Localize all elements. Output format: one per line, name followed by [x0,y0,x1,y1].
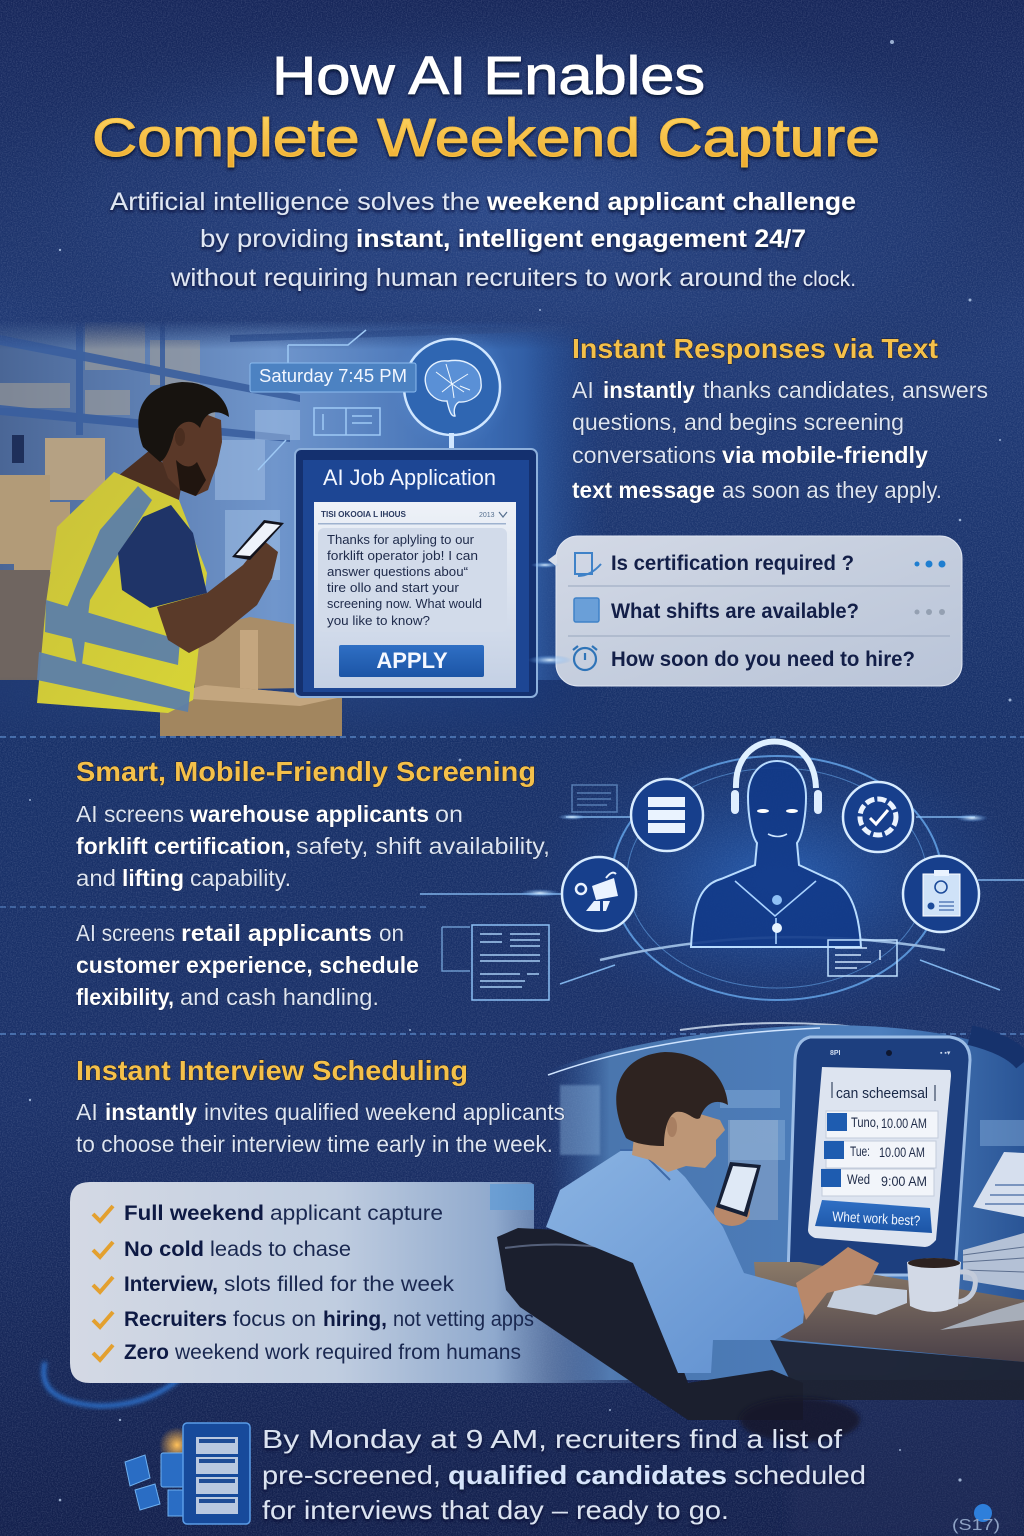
recruiter [546,1052,879,1373]
body: interview scheduling [76,1099,565,1157]
closing statement: pre-screened, [262,1460,441,1490]
benefits checklist card: Full weekend [124,1202,264,1225]
benefits checklist card: Recruiters [124,1308,227,1331]
body: warehouse screening: lifting [122,865,184,891]
body: retail screening: customer experience, schedule [76,952,419,978]
body: warehouse screening: on [435,801,463,827]
tablet: AI job application: forklift operator job! I can [327,549,478,563]
timestamp badge: Saturday 7:45 PM [259,366,407,386]
benefits checklist card: leads to chase [210,1238,351,1261]
benefits checklist card: focus on [233,1308,316,1331]
closing statement [262,1424,866,1525]
tablet: AI job application: answer questions abou“ [327,565,468,579]
tablet: scheduling: 8PI [830,1050,841,1057]
icon: alarm clock [573,646,597,670]
icon: brain hologram [390,325,514,449]
body: instant responses [572,377,988,503]
desk [754,1262,1024,1362]
figure: AI agent [691,742,861,947]
icon circle: check badge [843,782,913,852]
hair [616,1052,728,1146]
tablet: scheduling: 9:00 AM [881,1174,927,1189]
body: retail screening: retail applicants [181,920,372,946]
tablet: scheduling: 10.00 AM [879,1145,925,1160]
tablet: AI job application: screening now. What would [327,597,482,611]
icon circle: clipboard [903,856,979,932]
intro text: without requiring human recruiters to work around [170,264,763,292]
neck and face [632,1108,725,1172]
closing statement: By Monday at 9 AM, [262,1424,547,1454]
scene: warehouse worker and AI job application [0,320,610,740]
chat question card: What shifts are available? [611,600,859,623]
scene: recruiter at desk [497,1037,1024,1442]
benefits checklist card: weekend work required from humans [174,1341,521,1364]
body: instant responses: questions, and begins screening [572,409,904,435]
face [160,412,222,496]
chat question card [556,536,962,686]
page code badge [952,1504,1000,1534]
tablet: AI job application: APPLY [376,648,448,673]
tablet: scheduling: Tue: [850,1144,870,1159]
closing statement: qualified candidates [448,1460,727,1490]
body: warehouse screening: warehouse applicants [189,801,429,827]
heading: smart screening: Smart, Mobile-Friendly Screening [76,756,536,787]
title: How AI Enables [272,46,705,106]
body: retail screening: flexibility, [76,984,174,1010]
laptop [827,1283,907,1315]
icon circle: lifting safety [562,857,636,931]
closing statement: recruiters find a list of [555,1424,843,1454]
tablet: scheduling: 10.00 AM [881,1116,927,1131]
phone [232,520,284,560]
benefits checklist card: hiring, [323,1308,387,1331]
title [92,46,880,168]
body: instant responses: conversations [572,442,716,468]
tablet: AI job application [295,449,537,697]
benefits checklist card: Zero [124,1341,169,1364]
body: warehouse screening: and [76,865,116,891]
office backdrop [548,1025,1024,1536]
body: warehouse screening: AI screens [76,801,184,827]
body: instant responses: text message [572,477,715,503]
closing statement: scheduled [734,1460,866,1490]
body: retail screening: and cash handling. [180,984,379,1010]
tablet: AI job application: you like to know? [327,614,430,628]
tablet: scheduling: can scheemsal [836,1085,928,1102]
body: warehouse screening [76,801,550,891]
chat question card: Is certification required ? [611,552,854,575]
status dots [914,560,946,568]
benefits checklist card: No cold [124,1238,204,1261]
timestamp badge [250,363,416,392]
body: instant responses: AI [572,377,594,403]
data lines [420,817,1024,990]
neck [118,450,182,505]
packing boxes [160,617,342,736]
benefits checklist card: slots filled for the week [224,1273,455,1296]
benefits checklist card: not vetting apps [393,1308,534,1331]
tablet: scheduling [788,1037,970,1275]
icon: certification [575,553,601,576]
stack of papers [963,1152,1024,1290]
benefits checklist card: applicant capture [270,1202,443,1225]
tablet: AI job application: Thanks for aplyling to our [327,533,474,547]
desk chair [497,1228,860,1442]
tablet: scheduling: Whet work best? [832,1208,921,1229]
intro text: instant, intelligent engagement 24/7 [356,225,806,253]
coffee mug [907,1258,975,1312]
body: instant responses: instantly [603,377,695,403]
AI hologram network [420,735,1024,1030]
body: interview scheduling: AI [76,1099,98,1125]
body: retail screening [76,920,419,1010]
icon: shifts [574,598,599,622]
tablet: AI job application: tire ollo and start your [327,581,459,595]
icon: server phone with documents [125,1423,250,1524]
document panels [442,785,897,1000]
intro text: Artificial intelligence solves the [110,188,480,216]
benefits checklist card [70,1182,660,1383]
body: warehouse screening: safety, shift availability, [296,833,550,859]
arm [157,540,278,653]
benefits checklist card: Interview, [124,1273,218,1296]
glow connector [528,554,572,665]
sleeve [118,505,207,608]
closing statement: for interviews that day – ready to go. [262,1495,729,1525]
hair [138,382,229,462]
title: Complete Weekend Capture [92,108,880,168]
tablet: AI job application: 2013 [479,512,495,519]
vest [37,472,207,713]
orbit rings [600,756,945,1030]
tablet: AI job application: TISI OKOOIA L IHOUS [321,509,406,519]
body: interview scheduling: invites qualified weekend applicants [204,1099,565,1125]
tablet: AI job application: AI Job Application [323,465,496,490]
heading: interview scheduling: Instant Interview Scheduling [76,1055,468,1086]
heading: instant responses: Instant Responses via Text [572,333,938,364]
intro text: the clock. [768,268,856,291]
body: instant responses: as soon as they apply. [722,477,942,503]
body: interview scheduling: instantly [105,1099,197,1125]
body: instant responses: thanks candidates, answers [703,377,988,403]
body: warehouse screening: forklift certification, [76,833,291,859]
body: retail screening: AI screens [76,920,175,946]
body: interview scheduling: to choose their interview time early in the week. [76,1131,553,1157]
small data box [258,330,380,470]
tablet: scheduling: Tuno, [851,1115,879,1130]
chat question card: How soon do you need to hire? [611,648,915,671]
arc glow [44,1362,185,1406]
tablet: scheduling: ▪ ▪▾ [940,1050,951,1057]
check icons [93,1206,113,1360]
page code badge: (S17) [952,1517,1000,1534]
idle dots [914,609,945,615]
warehouse backdrop [0,320,610,740]
icon circle: documents [631,779,703,851]
intro text [110,188,856,292]
intro text: weekend applicant challenge [486,188,856,216]
worker [37,382,284,713]
tablet: scheduling: Wed [847,1172,870,1187]
body: warehouse screening: capability. [190,865,291,891]
body: retail screening: on [379,920,404,946]
intro text: by providing [200,225,349,253]
body: instant responses: via mobile-friendly [722,442,928,468]
